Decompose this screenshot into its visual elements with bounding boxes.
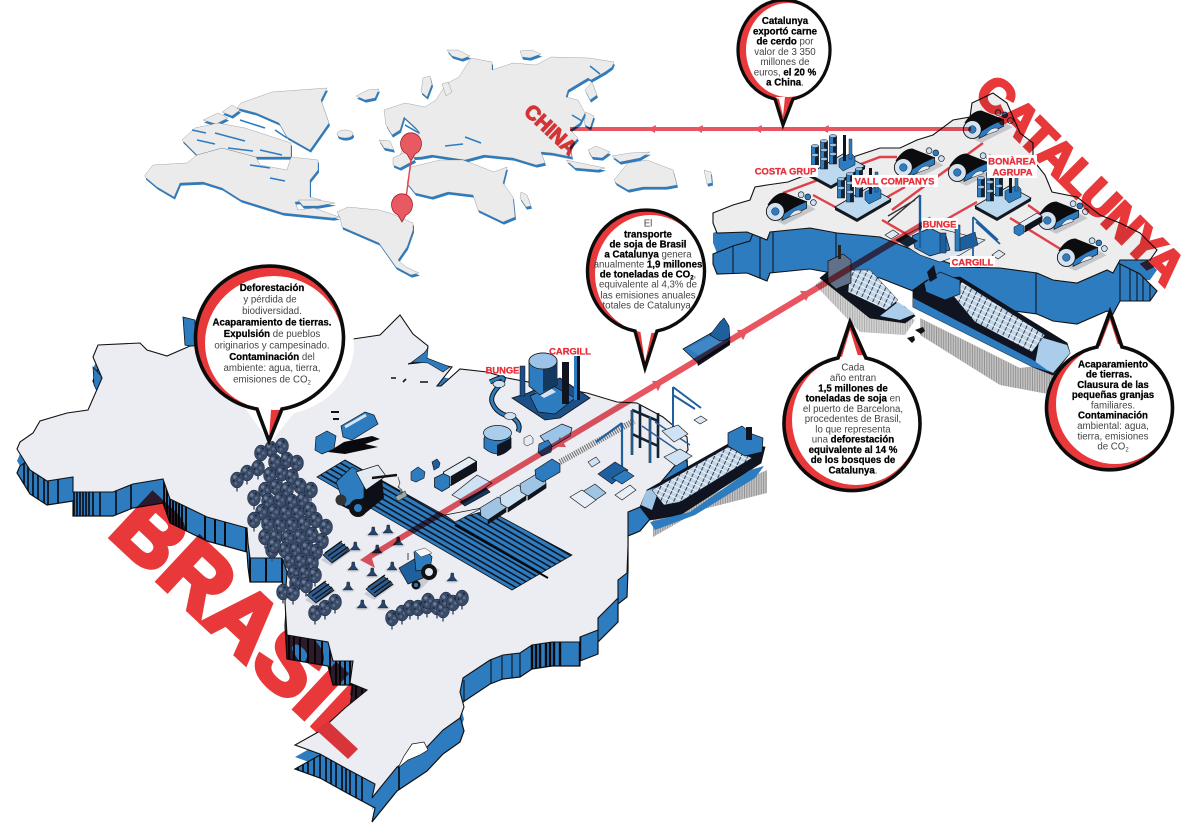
callout: deforestación: biodiversidad. bbox=[242, 306, 302, 317]
callout: deforestación: ambiente: agua, tierra, bbox=[224, 363, 320, 374]
callout: transporte de soja: equivalente al 4,3% de bbox=[599, 280, 697, 290]
callout: deforestación: 2 bbox=[307, 380, 311, 386]
yard containers and trucks bbox=[570, 457, 636, 508]
tractor bbox=[398, 548, 440, 590]
callout: acaparamiento Catalunya: Acaparamiento bbox=[1078, 360, 1148, 370]
callout: deforestación: Deforestación bbox=[240, 283, 304, 294]
callout: 1,5 millones de toneladas: Cada bbox=[841, 362, 865, 374]
callout: transporte de soja bbox=[588, 210, 706, 368]
small forklift and vehicle bbox=[411, 459, 440, 482]
callout: deforestación: Expulsión de pueblos bbox=[224, 329, 320, 340]
callout: deforestación: originarios y campesinado. bbox=[214, 340, 330, 352]
ship: small container ship bbox=[815, 245, 915, 335]
company labels: BUNGE bbox=[923, 218, 956, 230]
callout: acaparamiento Catalunya: pequeñas granjas bbox=[1072, 390, 1154, 401]
callout: exportó carne de cerdo: euros, el 20 % bbox=[754, 68, 817, 78]
Catalunya land side bbox=[712, 228, 1158, 325]
callout: acaparamiento Catalunya: de CO bbox=[1097, 442, 1125, 452]
L overlap on land bbox=[316, 721, 358, 759]
callout: exportó carne de cerdo: millones de bbox=[760, 57, 810, 68]
callout: transporte de soja: transporte bbox=[624, 230, 673, 240]
company labels: CARGILL bbox=[952, 256, 994, 268]
callout: acaparamiento Catalunya bbox=[1046, 312, 1174, 470]
callout: deforestación: y pérdida de bbox=[243, 294, 297, 306]
delivery truck bbox=[1014, 213, 1042, 236]
train bbox=[480, 459, 560, 524]
callout: transporte de soja: , bbox=[694, 270, 696, 280]
company labels: BONÀREA bbox=[988, 156, 1036, 166]
Brasil land surface bbox=[17, 315, 688, 798]
callout: 1,5 millones de toneladas: de los bosques de bbox=[811, 455, 896, 466]
callout: transporte de soja: de toneladas de CO bbox=[600, 270, 694, 282]
pig farms bbox=[766, 110, 1107, 271]
factory Bunge Cargill bbox=[490, 353, 590, 432]
callout: 1,5 millones de toneladas: lo que representa bbox=[815, 424, 891, 436]
callout: transporte de soja: El bbox=[644, 218, 652, 230]
callout: exportó carne de cerdo: de cerdo por bbox=[756, 36, 814, 48]
map pin: Barcelona bbox=[401, 133, 422, 161]
labels: Bunge, Cargill: CARGILL bbox=[549, 346, 591, 356]
tree stumps bbox=[341, 525, 459, 610]
callout: 1,5 millones de toneladas: una deforestación bbox=[812, 434, 894, 446]
small vessel at sea bbox=[683, 318, 730, 366]
callout: deforestación: Acaparamiento de tierras. bbox=[212, 318, 332, 328]
callout: acaparamiento Catalunya: 2 bbox=[1125, 448, 1129, 454]
world map bbox=[145, 50, 713, 278]
callout: exportó carne de cerdo: Catalunya bbox=[762, 16, 809, 27]
forest row south bbox=[386, 590, 468, 630]
callout: deforestación bbox=[195, 266, 354, 443]
callout: exportó carne de cerdo: a China. bbox=[766, 78, 804, 88]
label: China: CHINA bbox=[520, 101, 581, 160]
processing plants bbox=[809, 134, 1031, 222]
callout: transporte de soja: las emisiones anuales bbox=[600, 290, 696, 302]
callout: acaparamiento Catalunya: familiares. bbox=[1091, 400, 1135, 412]
callout: transporte de soja: a Catalunya genera bbox=[604, 250, 692, 260]
log piles bbox=[305, 541, 395, 606]
docked cargo ship Brasil bbox=[640, 426, 767, 537]
callout: deforestación: emisiones de CO bbox=[233, 374, 307, 386]
forest bbox=[230, 438, 342, 624]
islands bbox=[391, 378, 428, 382]
callout: 1,5 millones de toneladas: el puerto de Barcelona, bbox=[803, 404, 903, 415]
callout: acaparamiento Catalunya: Clausura de las bbox=[1077, 380, 1149, 391]
route line between pins bbox=[406, 160, 411, 198]
company labels bbox=[753, 155, 1037, 268]
port cranes bbox=[596, 387, 707, 477]
Catalunya land surface bbox=[713, 93, 1157, 283]
title: Catalunya: CATALUNYA bbox=[966, 65, 1196, 294]
map pin: Brasil bbox=[391, 194, 412, 222]
harvester bbox=[336, 465, 407, 517]
callout: acaparamiento Catalunya: ambiental: agua, bbox=[1077, 421, 1149, 432]
supply lines bbox=[783, 143, 1062, 250]
callout: 1,5 millones de toneladas: equivalente al 14 % bbox=[809, 445, 898, 456]
callout: exportó carne de cerdo: exportó carne bbox=[753, 26, 818, 38]
oil tanker truck and spill bbox=[315, 412, 380, 454]
panel: Brasil map bbox=[17, 315, 767, 822]
arrow: soybean route Brasil to Catalunya bbox=[360, 216, 933, 568]
callout: transporte de soja: 2 bbox=[690, 276, 694, 282]
company labels: VALL COMPANYS bbox=[855, 176, 934, 186]
callout: 1,5 millones de toneladas: 1,5 millones de bbox=[818, 384, 888, 394]
callout: acaparamiento Catalunya: tierra, emisiones bbox=[1077, 432, 1149, 442]
company labels: COSTA GRUP bbox=[755, 166, 816, 176]
callout: deforestación: Contaminación del bbox=[229, 352, 315, 363]
callout: 1,5 millones de toneladas bbox=[784, 322, 920, 491]
callout: 1,5 millones de toneladas: año entran bbox=[830, 373, 876, 384]
labels: Bunge, Cargill: BUNGE bbox=[486, 364, 519, 376]
callout: exportó carne de cerdo bbox=[738, 0, 830, 125]
rail platforms bbox=[445, 475, 492, 522]
Amazon mouth bbox=[412, 348, 450, 372]
title: BRASIL: BRASIL bbox=[94, 475, 403, 773]
reef rocks bbox=[907, 327, 925, 343]
callout: transporte de soja: totales de Catalunya. bbox=[602, 300, 694, 312]
labels: Bunge, Cargill bbox=[486, 346, 591, 376]
truck with container bbox=[434, 457, 476, 492]
panel: Catalunya map bbox=[713, 65, 1196, 330]
tanker truck bbox=[524, 424, 572, 456]
callout: exportó carne de cerdo: valor de 3 350 bbox=[754, 47, 816, 58]
company labels: AGRUPA bbox=[993, 166, 1033, 178]
bay island south bbox=[398, 742, 428, 768]
silo bbox=[484, 426, 512, 456]
callout: 1,5 millones de toneladas: Catalunya. bbox=[828, 466, 878, 476]
Barcelona port plant and cranes bbox=[885, 195, 1005, 262]
callout: acaparamiento Catalunya: Contaminación bbox=[1078, 410, 1148, 422]
soybean field bbox=[317, 460, 572, 590]
callout: transporte de soja: de soja de Brasil bbox=[610, 240, 686, 250]
rail track to port bbox=[560, 421, 634, 462]
Brasil land side bbox=[17, 317, 688, 822]
callout: 1,5 millones de toneladas: toneladas de soja en bbox=[806, 394, 900, 404]
callout: 1,5 millones de toneladas: procedentes de Brasil, bbox=[805, 414, 901, 425]
callout: acaparamiento Catalunya: de tierras. bbox=[1086, 370, 1132, 380]
ship: large container ship bbox=[913, 265, 1070, 395]
callout: transporte de soja: anualmente 1,9 millones bbox=[594, 260, 702, 270]
arrow: pork exports to China bbox=[570, 125, 971, 133]
